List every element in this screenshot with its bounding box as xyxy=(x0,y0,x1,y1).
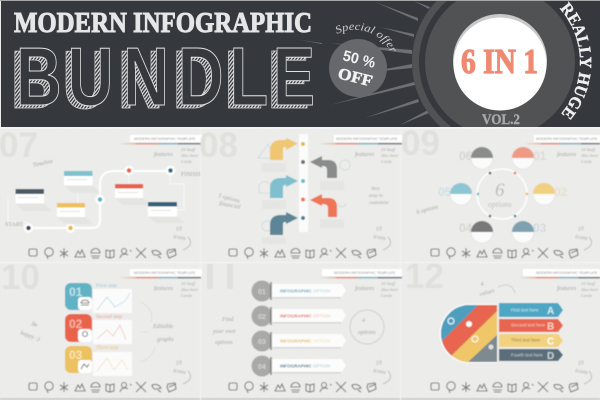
side note xyxy=(369,187,390,206)
panel: 12 pill with ribbons xyxy=(405,257,600,393)
timeline note: Timeline xyxy=(32,159,54,169)
options note xyxy=(217,193,241,211)
colour strip xyxy=(120,143,201,144)
ribbon D: D xyxy=(547,351,554,362)
connector scribbles xyxy=(8,171,184,222)
option 04: 04 xyxy=(459,221,473,235)
heading: bundle: BUNDLE xyxy=(11,33,310,126)
template title xyxy=(322,269,402,276)
tile 03: 03 xyxy=(69,348,83,362)
ribbon 02: INFOGRAPHIC xyxy=(280,314,312,318)
template title: MODERN INFOGRAPHIC TEMPLATE xyxy=(536,137,598,141)
ribbon C xyxy=(499,334,563,348)
ten icons note xyxy=(575,360,592,384)
icon row xyxy=(431,248,578,259)
options note: 6 options xyxy=(416,204,440,216)
features note: features xyxy=(154,151,174,158)
customizable graphs note: Editable xyxy=(152,324,174,330)
ten icons note: 10 xyxy=(577,360,584,367)
features note: 10 Stuff xyxy=(181,281,196,286)
features note: features xyxy=(355,285,375,292)
features note: 10 Stuff xyxy=(581,147,596,152)
features note: Also here xyxy=(380,287,398,292)
features note xyxy=(154,147,198,164)
ribbon B: Second text here xyxy=(511,322,546,328)
ten icons note: 10 xyxy=(375,360,382,367)
ribbon 03: 03 xyxy=(258,339,266,346)
tile 03 xyxy=(65,346,92,373)
card: yellow xyxy=(57,203,93,224)
number 08: 08 xyxy=(199,126,238,165)
side note: Very xyxy=(371,187,381,192)
template title: MODERN INFOGRAPHIC TEMPLATE xyxy=(536,271,598,275)
icon row xyxy=(431,382,578,393)
arrow: yellow xyxy=(270,138,298,160)
card: dark xyxy=(16,189,52,211)
features note: Also here xyxy=(580,287,598,292)
chart 01 xyxy=(93,283,132,313)
ten icons note: icons xyxy=(373,368,387,376)
features note: Also here xyxy=(380,153,398,158)
colour strip xyxy=(525,143,600,144)
be happy note: Be xyxy=(30,321,39,329)
template title: MODERN INFOGRAPHIC TEMPLATE xyxy=(334,271,396,275)
panel: header banner xyxy=(0,0,600,128)
number 12: 12 xyxy=(405,257,444,296)
badge: special offer: Special offer xyxy=(336,23,396,52)
heading: modern infographic: MODERN INFOGRAPHIC xyxy=(14,7,312,39)
find your options note: options xyxy=(215,340,233,346)
badge: 6 in 1 disc xyxy=(415,0,575,137)
ribbon 04 xyxy=(252,356,346,376)
editable note xyxy=(479,281,515,298)
colour strip xyxy=(320,143,402,144)
four options circle xyxy=(350,310,384,344)
arrow: orange xyxy=(310,194,337,217)
features note: Cards xyxy=(581,159,592,164)
panel: 08 arrows xyxy=(199,126,402,259)
editable note: values xyxy=(479,288,496,298)
badge: special offer: 50 % xyxy=(341,47,377,72)
tile 02 xyxy=(65,314,92,342)
features note: 10 Stuff xyxy=(181,147,196,152)
ribbon D xyxy=(499,349,563,362)
icon row xyxy=(229,248,376,259)
badge: special offer xyxy=(329,23,396,97)
badge: 6 in 1 disc: VOL.2 xyxy=(482,112,520,128)
number 09: 09 xyxy=(401,124,440,163)
colour strip xyxy=(520,277,600,278)
chart 02: Second step xyxy=(96,314,122,320)
ribbon 04: INFOGRAPHIC xyxy=(280,364,312,368)
icon row xyxy=(29,382,176,393)
ribbon B xyxy=(499,319,563,332)
features note xyxy=(154,281,198,298)
icon row xyxy=(229,382,376,393)
template title: MODERN INFOGRAPHIC TEMPLATE xyxy=(134,271,196,275)
timeline dots xyxy=(25,167,174,232)
four options circle: 4 xyxy=(362,317,365,324)
ten icons note xyxy=(575,226,592,250)
chart 03 xyxy=(93,345,132,376)
template title xyxy=(334,135,402,142)
option 02 xyxy=(533,183,568,205)
ten icons note xyxy=(173,226,191,250)
panel: 11 ribbons xyxy=(207,264,402,393)
column dots xyxy=(301,142,305,220)
ribbon 02: 02 xyxy=(258,314,266,321)
template title: MODERN INFOGRAPHIC TEMPLATE xyxy=(134,137,196,141)
ten icons note: icons xyxy=(173,368,187,376)
ribbon A: First text here xyxy=(511,308,539,312)
ten icons note xyxy=(373,226,391,250)
centre ring xyxy=(477,169,527,219)
side note: easy to xyxy=(369,194,384,199)
features note: Cards xyxy=(381,293,392,298)
card: navy xyxy=(148,202,185,223)
features note: features xyxy=(355,151,375,158)
ribbon C: Third text here xyxy=(511,338,541,342)
template title xyxy=(130,269,202,276)
ribbon 01: 01 xyxy=(258,289,266,296)
tile 01 xyxy=(65,283,92,310)
panel: 09 six options xyxy=(401,124,600,259)
option 05 xyxy=(438,183,472,205)
options note: 5 options xyxy=(217,193,241,205)
ten icons note xyxy=(173,360,191,384)
features note: 10 Stuff xyxy=(381,281,396,286)
ten icons note: 10 xyxy=(577,226,584,233)
heading: bundle: BUNDLE xyxy=(16,30,315,123)
centre column xyxy=(299,134,308,232)
ribbon 04: 04 xyxy=(258,364,266,371)
arrow: grey xyxy=(310,156,337,178)
ribbon D: Fourth text here xyxy=(511,352,543,358)
tile 02: 02 xyxy=(69,317,83,331)
panel: 07 timeline xyxy=(0,126,202,259)
ribbon 01: OPTION xyxy=(313,288,330,294)
ribbon 03 xyxy=(252,330,346,352)
ribbon A: A xyxy=(547,306,554,317)
option 06: 06 xyxy=(459,149,473,163)
centre ring: options xyxy=(488,200,512,209)
ribbon 02: OPTION xyxy=(313,314,330,318)
ribbon B: B xyxy=(547,322,554,332)
chart 01: First step xyxy=(95,283,117,289)
option 06 xyxy=(459,147,493,169)
ten icons note: icons xyxy=(575,368,589,376)
finish label: FINISH xyxy=(181,172,201,178)
ten icons note: icons xyxy=(173,234,187,242)
features note xyxy=(557,281,598,298)
panel group: six template previews xyxy=(0,124,600,400)
ribbon C: C xyxy=(547,336,554,348)
ribbon 02 xyxy=(252,306,346,326)
features note: Cards xyxy=(381,159,392,164)
caption lines xyxy=(262,163,344,244)
features note: features xyxy=(557,151,577,158)
ten icons note: icons xyxy=(575,234,589,242)
find your options note: your own xyxy=(212,329,236,335)
four options circle: options xyxy=(358,330,376,336)
features note: 10 Stuff xyxy=(381,147,396,152)
find your options note xyxy=(212,317,236,346)
features note: Also here xyxy=(180,287,198,292)
features note: Also here xyxy=(180,153,198,158)
features note: features xyxy=(154,285,174,292)
option 03: 03 xyxy=(533,221,547,235)
badge: special offer: OFF xyxy=(336,65,374,90)
option 02: 02 xyxy=(554,185,568,199)
card: teal xyxy=(64,171,100,193)
ribbon 01 xyxy=(252,280,346,302)
panel: 10 charts xyxy=(1,258,202,393)
features note: Cards xyxy=(181,293,192,298)
number 07: 07 xyxy=(0,126,38,165)
template title xyxy=(130,135,202,142)
decorative rays xyxy=(300,1,430,125)
customizable graphs note xyxy=(141,302,174,362)
chart 03: Third step xyxy=(96,345,119,351)
ten icons note: 10 xyxy=(375,226,382,233)
pill diagram xyxy=(440,304,498,363)
number 10: 10 xyxy=(1,258,40,297)
ten icons note: icons xyxy=(373,234,387,242)
editable note: 4 xyxy=(480,281,484,288)
arrow: teal xyxy=(270,175,298,198)
card: red xyxy=(115,184,151,205)
ten icons note: 10 xyxy=(175,226,182,233)
template title: MODERN INFOGRAPHIC TEMPLATE xyxy=(336,137,398,141)
find your options note: Find xyxy=(221,317,234,323)
centre ring: 6 xyxy=(495,180,505,201)
side note: customize xyxy=(369,201,390,206)
features note xyxy=(355,147,398,164)
colour strip xyxy=(320,277,402,278)
ten icons note: 10 xyxy=(175,360,182,367)
timeline path xyxy=(28,171,171,228)
sketch outlines behind arrows xyxy=(258,144,350,231)
ribbon 01: INFOGRAPHIC xyxy=(280,288,312,294)
label: really huge: REALLY HUGE xyxy=(560,1,592,120)
tile 01: 01 xyxy=(69,285,83,299)
template title xyxy=(534,135,600,142)
ribbon A xyxy=(499,303,563,317)
features note: Cards xyxy=(181,159,192,164)
ring dots xyxy=(477,172,528,217)
arrow: steel xyxy=(270,212,298,235)
ribbon 03: INFOGRAPHIC xyxy=(280,338,312,344)
features note: features xyxy=(557,285,577,292)
icon row xyxy=(29,248,176,259)
template title xyxy=(523,269,600,276)
be happy note: happy :) xyxy=(19,329,41,343)
features note xyxy=(355,281,398,298)
badge: 6 in 1 disc: 6 IN 1 xyxy=(461,42,538,81)
features note: Also here xyxy=(580,153,598,158)
option 01: 01 xyxy=(533,149,547,163)
chart 02 xyxy=(93,314,132,344)
start label: START xyxy=(5,222,23,228)
option 01 xyxy=(512,147,547,169)
colour strip xyxy=(120,277,201,278)
customizable graphs note: graphs xyxy=(157,337,174,343)
option 05: 05 xyxy=(438,185,452,199)
number 11 xyxy=(207,264,233,289)
option 03 xyxy=(512,221,547,243)
option 04 xyxy=(459,221,493,243)
features note xyxy=(557,147,598,164)
ribbon 04: OPTION xyxy=(313,364,330,368)
options note: financial xyxy=(219,200,241,211)
be happy note xyxy=(19,321,41,343)
ten icons note xyxy=(373,360,391,384)
features note: Cards xyxy=(581,293,592,298)
features note: 10 Stuff xyxy=(581,281,596,286)
ribbon 03: OPTION xyxy=(313,338,330,344)
